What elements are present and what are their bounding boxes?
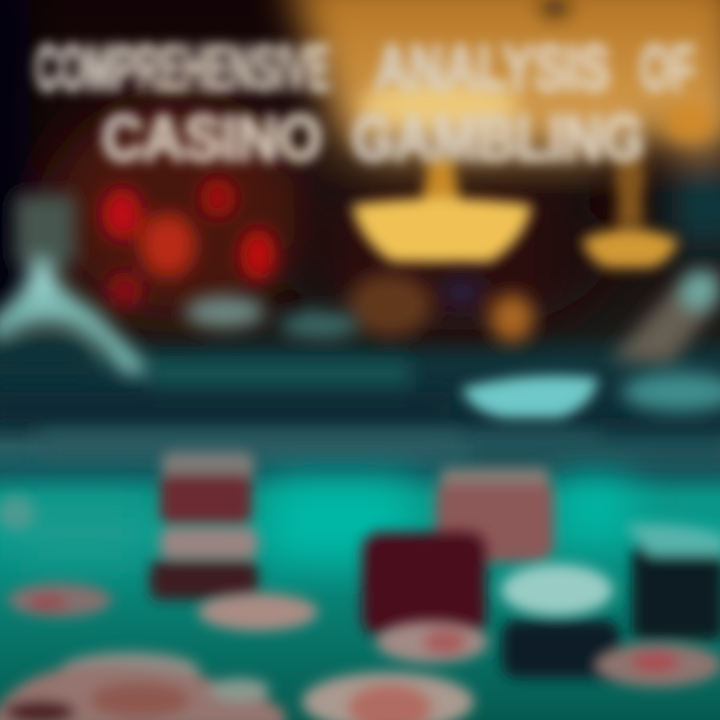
teal bowl right bbox=[622, 372, 720, 412]
red casino lights bbox=[102, 178, 276, 308]
ceiling highlights bbox=[360, 0, 716, 190]
chips: bottom left pile bbox=[0, 652, 285, 720]
chip: bottom centre bbox=[302, 672, 474, 720]
chip: pale teal bbox=[501, 564, 613, 616]
upper room: maroon walls and gold ceiling bbox=[0, 0, 720, 330]
title: CASINO bbox=[102, 102, 322, 174]
table rail and bowls bbox=[0, 362, 720, 468]
title: GAMBLING bbox=[352, 102, 644, 174]
background machines bbox=[185, 270, 720, 365]
chip stack: centre back bbox=[436, 468, 554, 562]
chandelier: second bowl and stem bbox=[582, 170, 678, 268]
lower room warm glows bbox=[348, 273, 534, 342]
title bbox=[35, 32, 695, 174]
left figure bbox=[0, 195, 155, 375]
teal bowl bbox=[462, 376, 598, 418]
chip: right bbox=[594, 643, 720, 687]
chip: below left stack bbox=[198, 593, 318, 631]
chip stack: left bbox=[150, 452, 258, 600]
felt highlight bbox=[20, 480, 630, 560]
chip stack: dark right bbox=[502, 524, 720, 678]
title: COMPREHENSIVE bbox=[35, 32, 330, 104]
chip: front bbox=[376, 621, 488, 663]
title: ANALYSIS bbox=[375, 32, 610, 104]
chip stack: maroon bbox=[362, 532, 486, 636]
chandelier: main bowl and stem bbox=[352, 155, 532, 262]
chip: felt left bbox=[0, 495, 112, 617]
